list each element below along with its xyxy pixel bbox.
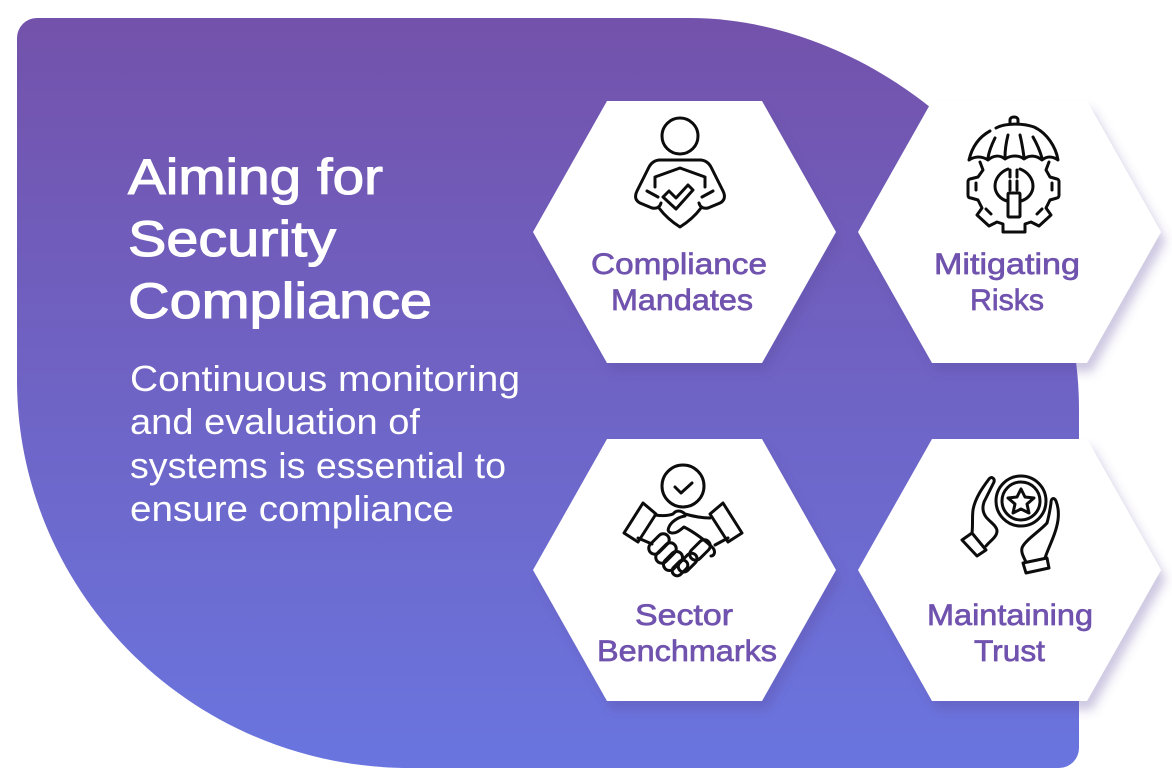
icon: person holding shield — [636, 118, 724, 227]
title: Security — [128, 211, 336, 267]
icon: hands holding star coin — [962, 476, 1058, 573]
label — [934, 248, 1080, 317]
icon: handshake with check — [624, 465, 742, 578]
label: Mitigating — [934, 248, 1080, 281]
panel: maintaining trust hexagon — [858, 439, 1161, 701]
panel: mitigating risks hexagon — [858, 101, 1161, 363]
title — [128, 149, 432, 329]
label: Mandates — [611, 284, 753, 317]
description text: and evaluation of — [130, 401, 421, 442]
description text: ensure compliance — [130, 488, 454, 529]
panel: sector benchmarks hexagon — [533, 439, 836, 701]
description text: Continuous monitoring — [130, 358, 520, 399]
title: Aiming for — [128, 149, 383, 205]
label: Trust — [974, 635, 1046, 668]
label: Compliance — [591, 248, 767, 281]
icon: umbrella over gear — [968, 117, 1059, 232]
title: Compliance — [128, 273, 432, 329]
label — [597, 599, 777, 668]
label: Risks — [970, 284, 1044, 317]
label — [591, 248, 767, 317]
panel: compliance mandates hexagon — [533, 101, 836, 363]
label — [927, 599, 1093, 668]
description text: systems is essential to — [130, 445, 506, 486]
label: Benchmarks — [597, 635, 777, 668]
description text — [130, 358, 520, 529]
label: Sector — [635, 599, 733, 632]
label: Maintaining — [927, 599, 1093, 632]
